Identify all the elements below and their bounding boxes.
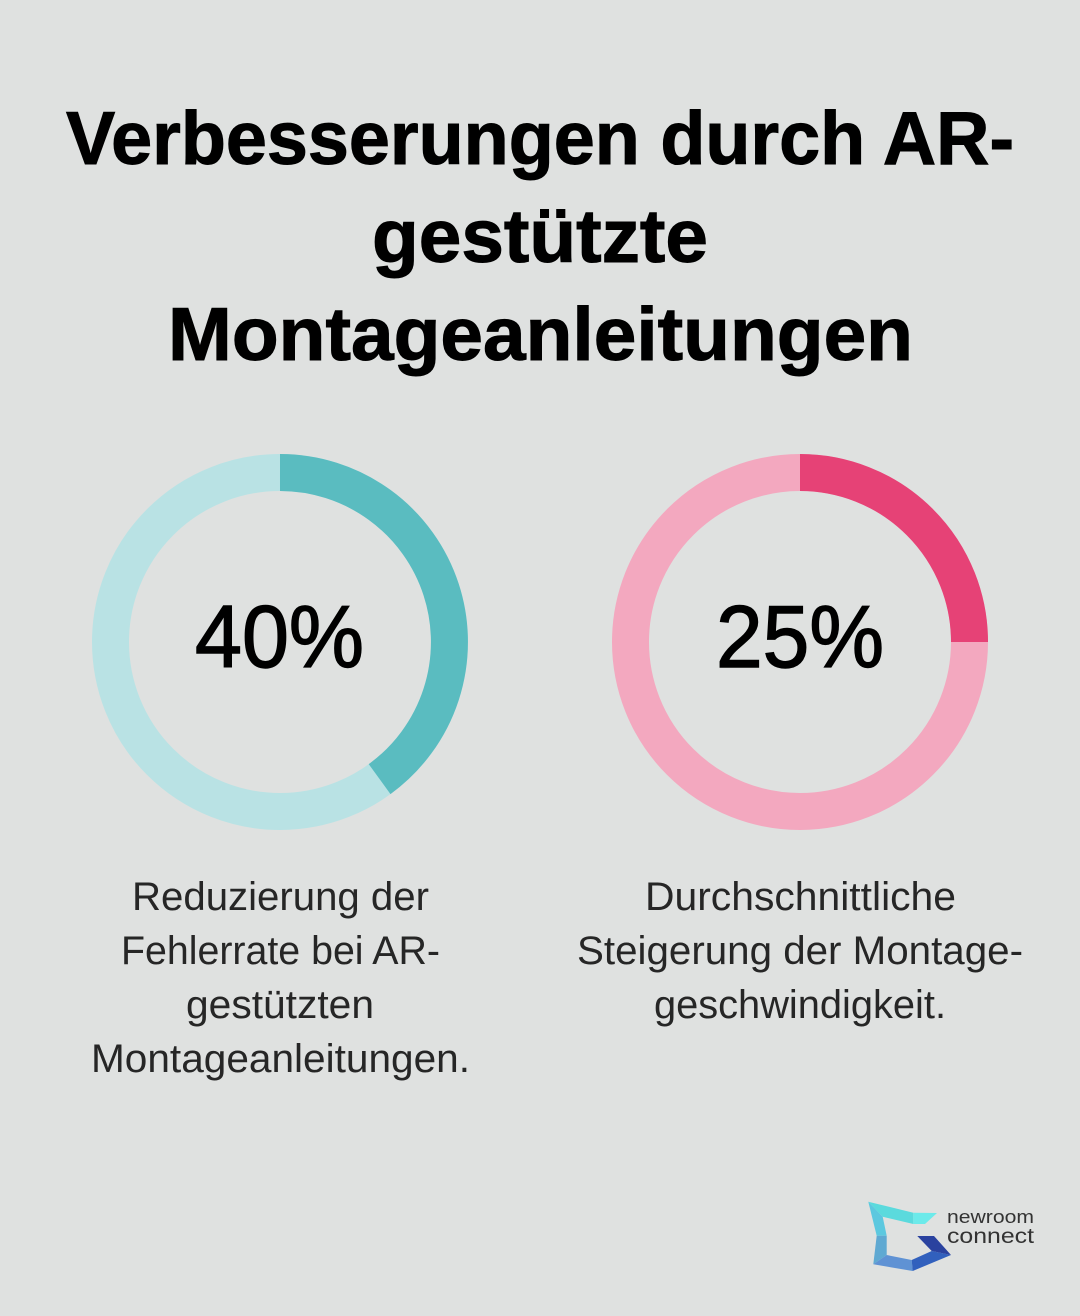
description: assembly speed <box>577 875 1023 1027</box>
description: assembly speed: Durchschnittliche <box>645 875 956 919</box>
icon: logo mark <box>868 1202 951 1271</box>
description: error rate: Fehlerrate bei AR- <box>121 929 440 973</box>
wordmark <box>947 1207 1034 1248</box>
panel: 25 percent statistic <box>577 472 1023 1027</box>
description: error rate <box>91 875 470 1081</box>
value: 25%: 25% <box>716 587 884 686</box>
panel: 40 percent statistic <box>91 472 470 1081</box>
description: error rate: gestützten <box>186 983 374 1027</box>
description: assembly speed: geschwindigkeit. <box>654 983 946 1027</box>
wordmark: connect <box>947 1225 1034 1248</box>
description: error rate: Reduzierung der <box>132 875 429 919</box>
title: gestützte <box>372 194 708 278</box>
description: error rate: Montageanleitungen. <box>91 1037 470 1081</box>
title: Montageanleitungen <box>168 292 913 376</box>
donut chart: 40 percent <box>110 472 450 812</box>
value: 40%: 40% <box>195 587 364 686</box>
title <box>66 96 1014 376</box>
wordmark: newroom <box>947 1207 1034 1227</box>
logo: newroom connect <box>868 1202 1034 1271</box>
title: Verbesserungen durch AR- <box>66 96 1014 180</box>
donut chart: 25 percent <box>630 472 970 812</box>
description: assembly speed: Steigerung der Montage- <box>577 929 1023 973</box>
